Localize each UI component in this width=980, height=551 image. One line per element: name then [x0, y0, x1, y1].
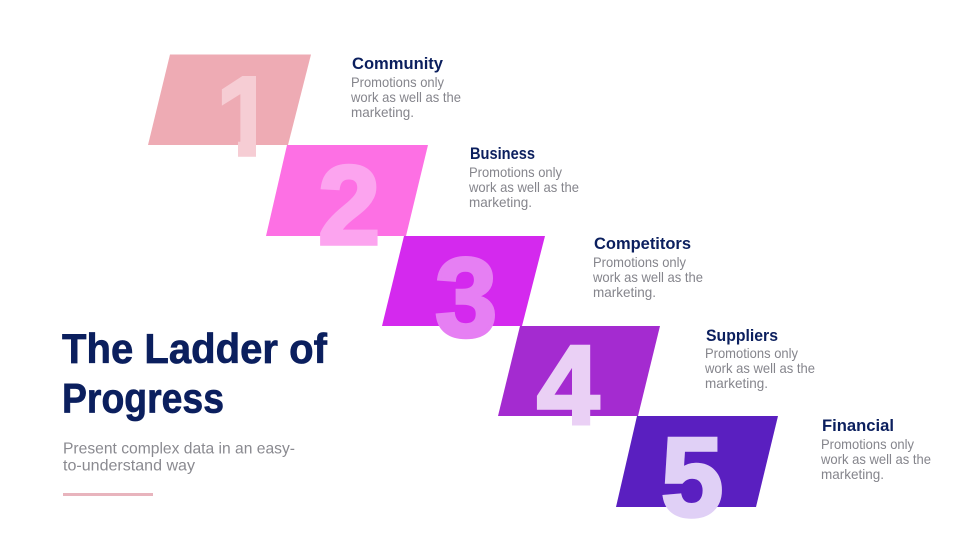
number 3: 3 — [435, 235, 497, 360]
title: The Ladder of — [62, 325, 328, 372]
parallelogram 5 — [616, 416, 778, 507]
description 2: work as well as the — [468, 179, 579, 195]
description 4: marketing. — [705, 375, 768, 391]
description 3: Promotions only — [593, 254, 686, 270]
description 4: work as well as the — [704, 360, 815, 376]
accent line — [63, 493, 153, 496]
description 1: work as well as the — [350, 89, 461, 105]
description 1: Promotions only — [351, 74, 444, 90]
parallelogram 4 — [498, 326, 660, 416]
heading: Financial: Financial — [822, 416, 894, 435]
description 3 — [592, 254, 703, 300]
step 5: financial — [616, 415, 931, 540]
heading: Business: Business — [470, 144, 535, 163]
heading: Competitors: Competitors — [594, 234, 691, 253]
number 1: 1 — [216, 54, 278, 179]
description 5 — [820, 436, 931, 482]
parallelogram 3 — [382, 236, 545, 326]
step 2: business — [266, 143, 579, 268]
parallelogram 1 — [148, 54, 311, 145]
number 5: 5 — [661, 415, 723, 540]
description 3: work as well as the — [592, 269, 703, 285]
heading: Suppliers: Suppliers — [706, 326, 778, 345]
description 4: Promotions only — [705, 345, 798, 361]
description 3: marketing. — [593, 284, 656, 300]
description 2: Promotions only — [469, 164, 562, 180]
subtitle: to-understand way — [63, 458, 195, 474]
step 3: competitors — [382, 234, 703, 360]
description 5: work as well as the — [820, 451, 931, 467]
description 1 — [350, 74, 461, 120]
step 1: community — [148, 54, 460, 157]
heading: Community: Community — [352, 54, 444, 73]
title — [62, 325, 328, 422]
subtitle: Present complex data in an easy- — [63, 440, 295, 458]
parallelogram 2 — [266, 145, 428, 236]
step 4: suppliers — [498, 323, 815, 448]
description 5: Promotions only — [821, 436, 914, 452]
description 5: marketing. — [821, 466, 884, 482]
number 4: 4 — [537, 323, 599, 448]
subtitle — [63, 440, 295, 474]
description 1: marketing. — [351, 104, 414, 120]
description 2: marketing. — [469, 194, 532, 210]
number 2: 2 — [318, 143, 380, 268]
title: Progress — [62, 374, 224, 422]
description 4 — [704, 345, 815, 391]
description 2 — [468, 164, 579, 210]
